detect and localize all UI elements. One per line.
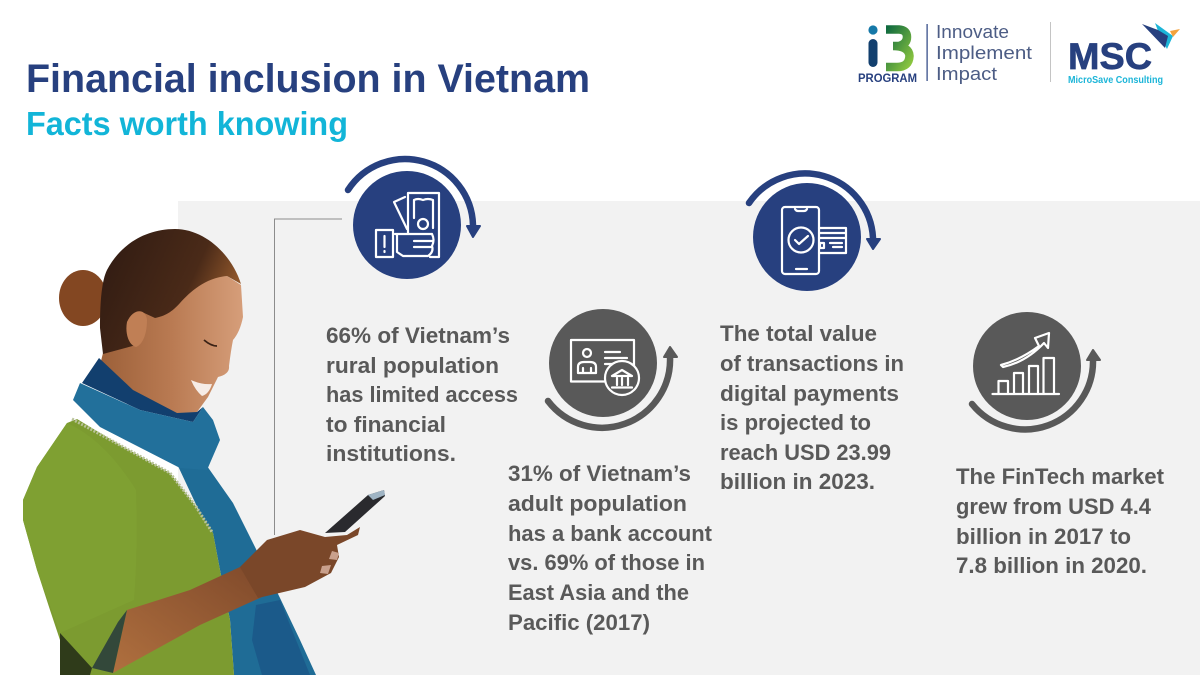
fact 4: text: grew from USD 4.4 — [956, 494, 1152, 519]
title: Financial inclusion in Vietnam — [26, 57, 590, 101]
phone — [325, 490, 385, 533]
cuff — [92, 610, 127, 673]
ear — [126, 311, 147, 347]
phone highlight — [368, 490, 385, 500]
fact 2: text: adult population — [508, 491, 687, 516]
subtitle: Facts worth knowing — [26, 105, 348, 142]
fact 1: text: institutions. — [326, 441, 456, 466]
logo: tagline: Impact — [936, 64, 997, 84]
fact 1: text: 66% of Vietnam’s — [326, 323, 510, 348]
logo: tagline — [936, 22, 1032, 84]
eye and smile — [204, 340, 217, 346]
fact 4: text: 7.8 billion in 2020. — [956, 553, 1147, 578]
sleeve seam and shading — [23, 423, 137, 633]
woman with phone — [23, 229, 385, 675]
green shirt — [23, 419, 234, 675]
main scarf — [73, 383, 220, 470]
panel: grey background — [178, 201, 1200, 675]
icon: hand with banknotes — [376, 193, 439, 257]
fact 4: text: billion in 2017 to — [956, 524, 1131, 549]
fact 2: text: 31% of Vietnam’s — [508, 461, 691, 486]
neck trim — [72, 419, 212, 532]
fact 3: text: of transactions in — [720, 351, 904, 376]
fact 1: money icon — [348, 159, 480, 279]
icon: bars and arrow — [992, 333, 1059, 394]
fact 1: text: to financial — [326, 412, 446, 437]
fact 3: text: reach USD 23.99 — [720, 440, 891, 465]
bun — [59, 270, 107, 326]
fact 2: text: Pacific (2017) — [508, 610, 650, 635]
fact 1: text: has limited access — [326, 382, 518, 407]
logo: tagline: Implement — [936, 43, 1032, 63]
fact 4: text: The FinTech market — [956, 464, 1165, 489]
fact 2: text: has a bank account — [508, 521, 713, 546]
logo separator — [1050, 22, 1051, 82]
fact 4: text — [956, 464, 1165, 578]
fact 3: text: digital payments — [720, 381, 899, 406]
upper scarf — [82, 358, 203, 422]
fact 2: bank account icon — [548, 309, 677, 428]
arm — [113, 567, 262, 673]
hair — [100, 229, 241, 354]
fingertips — [320, 551, 339, 574]
connector line — [274, 219, 342, 535]
fact 1: text — [326, 323, 518, 466]
fact 4: growth chart icon — [972, 312, 1100, 429]
fact 2: text: vs. 69% of those in — [508, 550, 705, 575]
fact 2: text: East Asia and the — [508, 580, 689, 605]
fact 3: digital payment icon — [749, 173, 880, 291]
fact 3: text: is projected to — [720, 410, 871, 435]
logo: MSC — [1068, 23, 1180, 86]
logo: i3 program — [858, 25, 917, 85]
fact 2: text — [508, 461, 713, 635]
lower left shadow — [60, 633, 92, 675]
logo divider — [926, 24, 928, 81]
icon: ID card with bank — [571, 340, 639, 395]
logo: MSC: MicroSave Consulting — [1068, 74, 1163, 86]
fact 3: text: billion in 2023. — [720, 469, 875, 494]
scarf hanging — [178, 466, 316, 675]
neck and face — [100, 276, 243, 420]
logo: tagline: Innovate — [936, 22, 1009, 42]
fact 1: text: rural population — [326, 353, 499, 378]
hand — [240, 527, 360, 598]
logo: MSC: MSC — [1068, 36, 1152, 77]
fact 3: text — [720, 321, 904, 494]
fact 3: text: The total value — [720, 321, 877, 346]
logo: i3 program: PROGRAM — [858, 73, 917, 85]
icon: phone and card — [782, 207, 846, 274]
